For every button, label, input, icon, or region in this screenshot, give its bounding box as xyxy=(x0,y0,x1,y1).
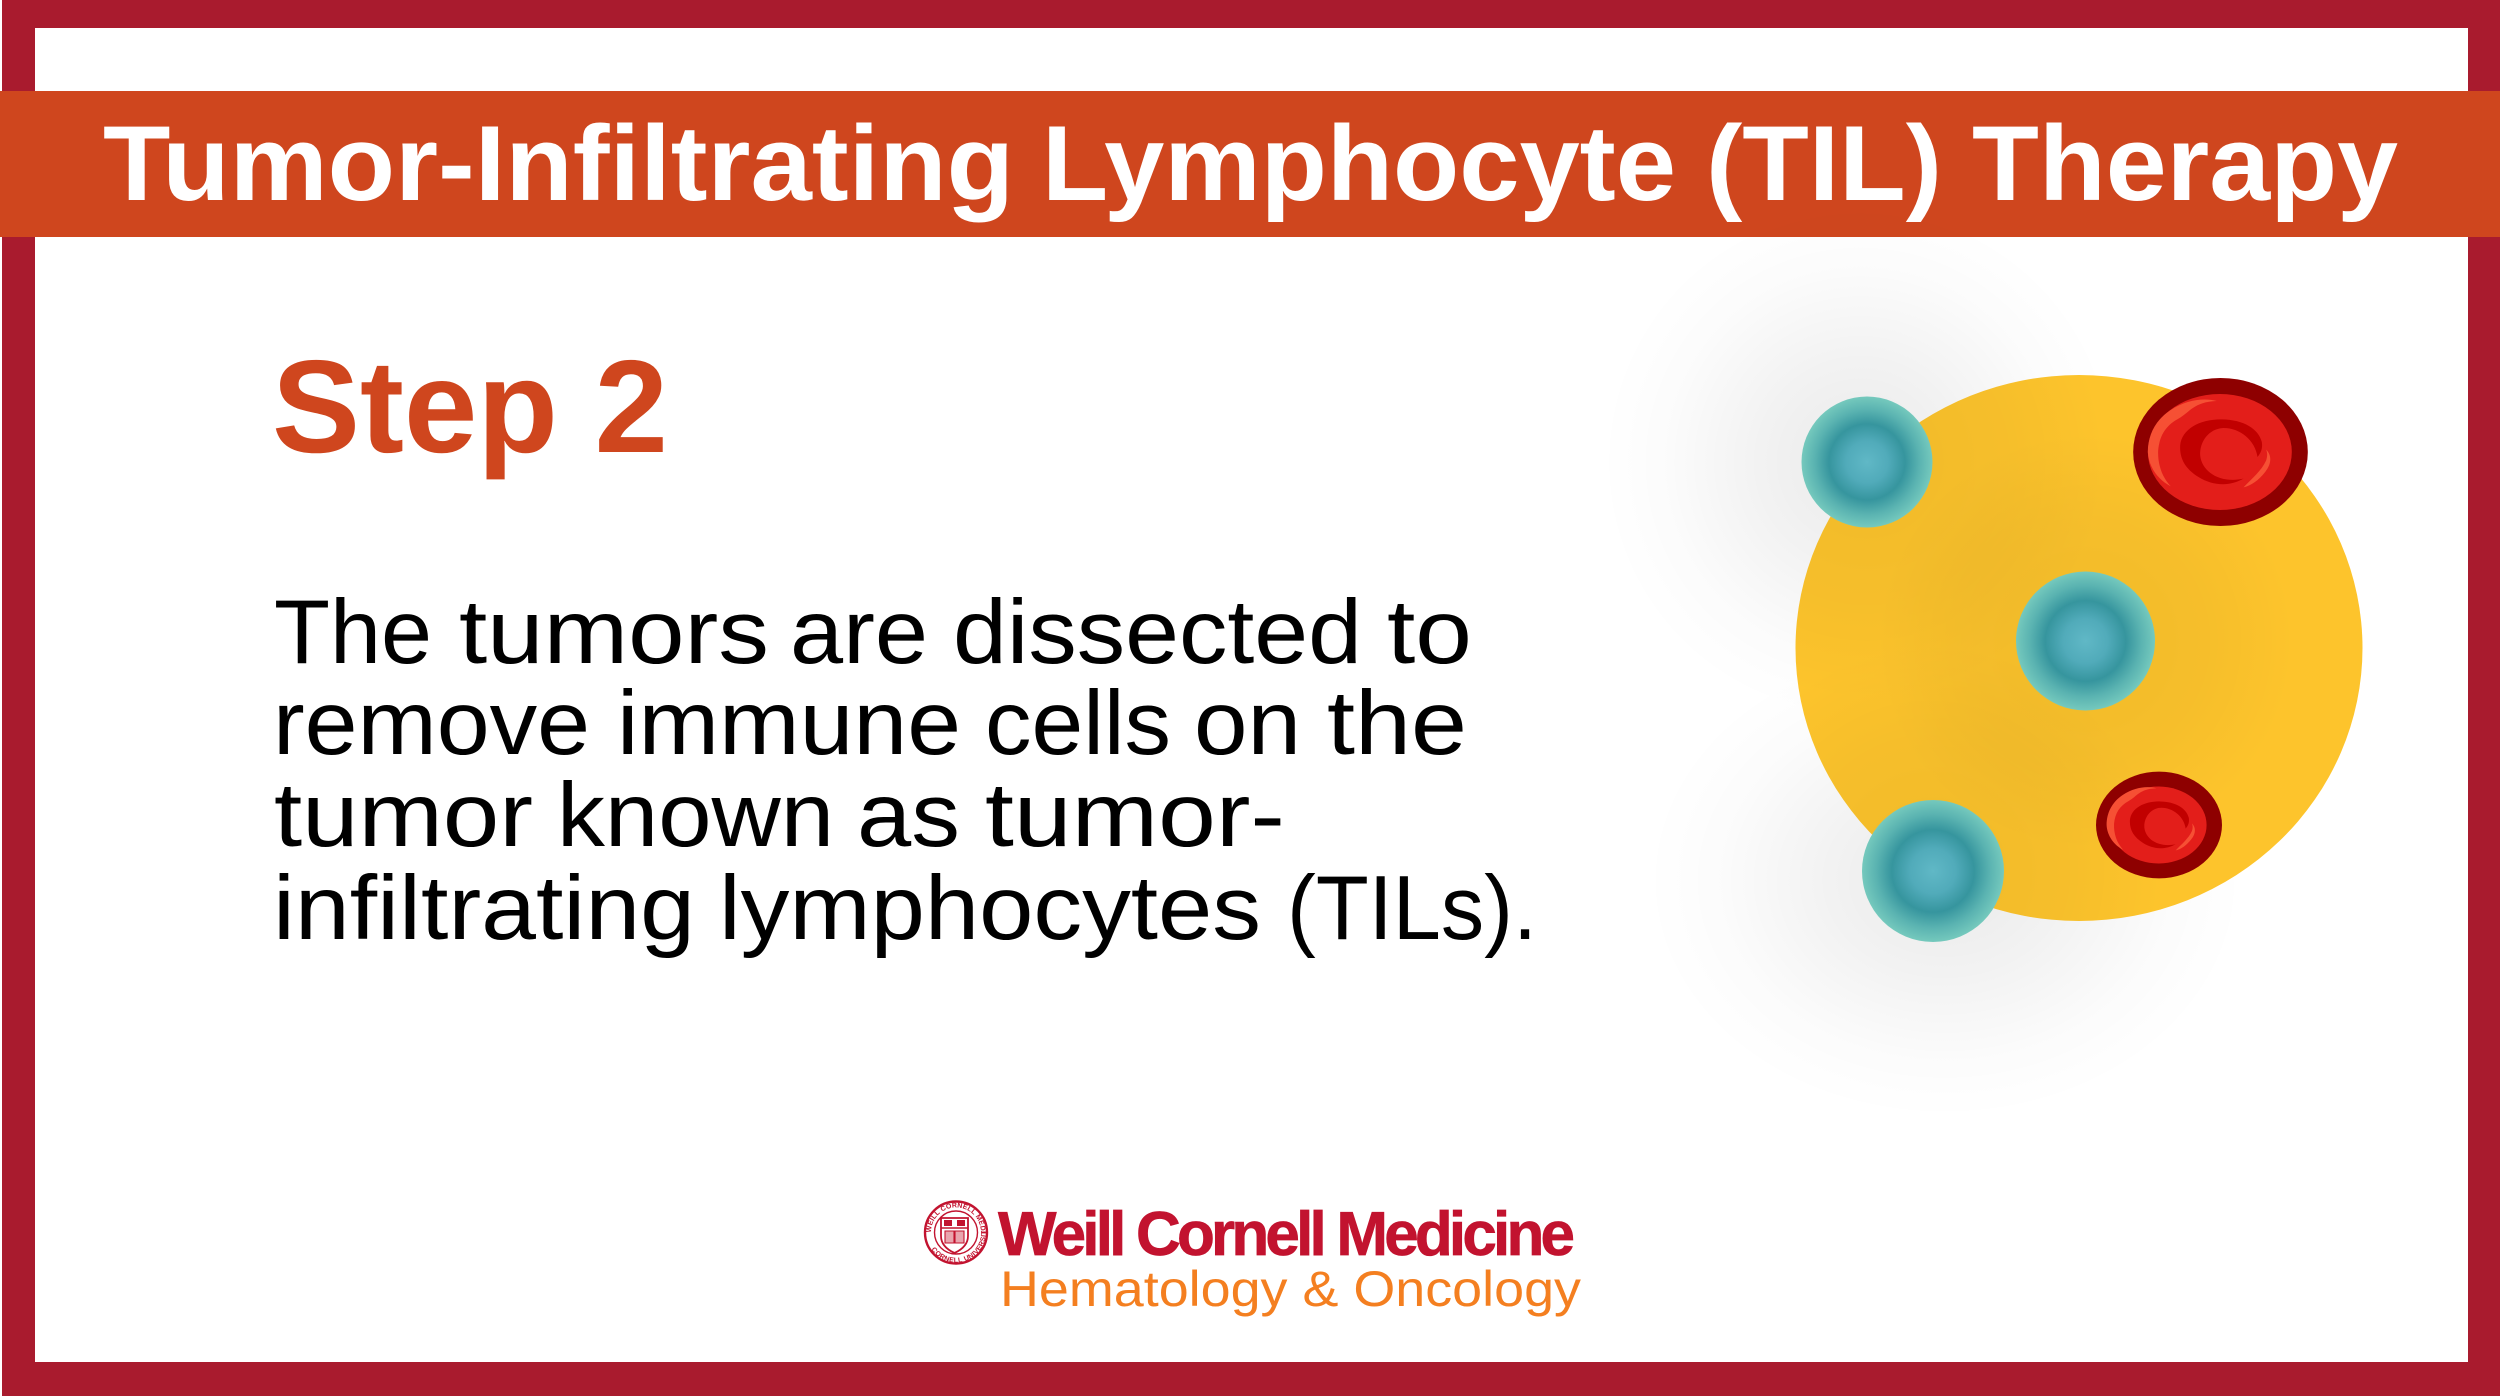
heading: step 2: Step 2 xyxy=(272,333,668,480)
body text: to xyxy=(1387,582,1472,683)
title banner: (TIL) xyxy=(1706,103,1942,223)
body text: cells xyxy=(985,673,1171,774)
illustration: tumor with immune and red blood cells xyxy=(1714,316,2362,1015)
logo: Weill Cornell Medicine Hematology & Oncology xyxy=(924,1200,1581,1317)
icon: university seal xyxy=(924,1200,988,1265)
body text: tumor xyxy=(274,765,533,866)
icon: university seal: WEILL CORNELL MEDICAL COLLEGE xyxy=(926,1202,986,1233)
icon: university seal: CORNELL UNIVERSITY xyxy=(932,1230,986,1262)
body text: infiltrating xyxy=(273,858,695,959)
red blood cell: upper right xyxy=(2133,378,2308,526)
body text: the xyxy=(1327,673,1467,774)
body text: lymphocytes xyxy=(719,858,1261,959)
department name: Hematology & Oncology xyxy=(1000,1261,1581,1317)
body text: dissected xyxy=(953,582,1362,683)
title banner: Tumor-Infiltrating xyxy=(103,103,1014,223)
body text: on xyxy=(1194,673,1301,774)
soft shadow: upper left xyxy=(1600,202,2120,722)
body text: (TILs). xyxy=(1287,858,1537,959)
body text xyxy=(273,582,1537,959)
title banner: Therapy xyxy=(1972,103,2398,223)
body text: tumors xyxy=(459,582,769,683)
immune cell: center xyxy=(2016,572,2155,710)
wordmark: Weill Cornell Medicine xyxy=(998,1200,1575,1269)
body text: known xyxy=(557,765,834,866)
body text: remove xyxy=(273,673,590,774)
immune cell: lower left xyxy=(1862,800,2004,942)
immune cell: upper left xyxy=(1802,396,1932,528)
body text: immune xyxy=(617,673,961,774)
title banner: Lymphocyte xyxy=(1042,103,1676,223)
title banner xyxy=(0,91,2500,237)
body text: tumor- xyxy=(985,765,1285,866)
tumor: yellow mass xyxy=(1796,375,2362,921)
body text: are xyxy=(790,582,928,683)
red blood cell: lower right xyxy=(2096,772,2222,878)
soft shadow: lower left xyxy=(1645,640,2245,1120)
body text: The xyxy=(274,582,432,683)
body text: as xyxy=(857,765,960,866)
